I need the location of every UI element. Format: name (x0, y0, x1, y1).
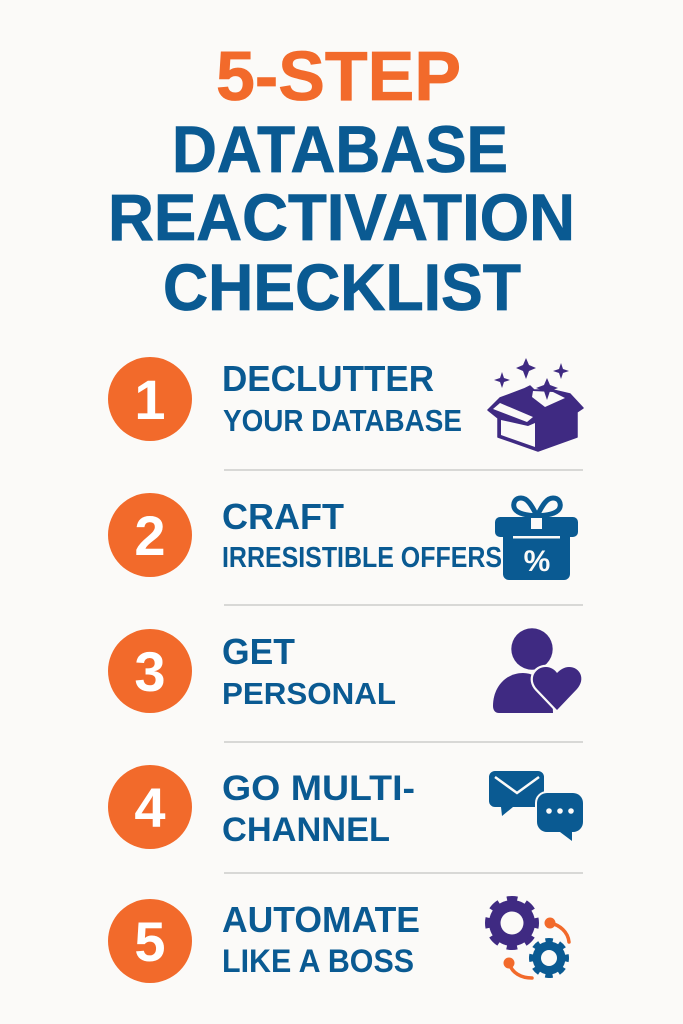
icon: gift with percent: % (524, 545, 550, 578)
step 4 text: CHANNEL (222, 811, 390, 849)
step 2 text: IRRESISTIBLE OFFERS (222, 542, 502, 574)
step 1 (108, 357, 583, 451)
number badge 2: 2 (134, 504, 166, 567)
icon: open box with sparkles (488, 358, 583, 451)
step 5 text: LIKE A BOSS (222, 943, 414, 979)
icon: envelope and chat bubble (489, 771, 583, 841)
number badge 1 (108, 357, 192, 441)
step 4 (108, 765, 583, 849)
step 2 text: CRAFT (222, 496, 344, 537)
step 5 text (222, 899, 420, 979)
number badge 5: 5 (134, 910, 166, 973)
step 3 text: PERSONAL (222, 676, 396, 711)
number badge 5 (108, 899, 192, 983)
icon: person with heart (493, 628, 581, 713)
step 3 text: GET (222, 631, 295, 672)
title: CHECKLIST (163, 250, 521, 324)
title: DATABASE (172, 112, 508, 186)
number badge 4 (108, 765, 192, 849)
step 3 text (222, 631, 396, 711)
icon: gift with percent (495, 498, 578, 580)
step 4 text (222, 769, 415, 849)
number badge 2 (108, 493, 192, 577)
title (108, 37, 575, 324)
title: REACTIVATION (108, 180, 575, 254)
step 1 text: YOUR DATABASE (223, 403, 462, 438)
step 4 text: GO MULTI- (222, 769, 415, 808)
step 5 text: AUTOMATE (222, 899, 420, 940)
title: 5-STEP (216, 37, 461, 115)
step 5 (108, 898, 569, 983)
number badge 3: 3 (134, 640, 166, 703)
number badge 1: 1 (134, 368, 166, 431)
number badge 3 (108, 629, 192, 713)
step 1 text: DECLUTTER (222, 358, 434, 399)
step 2 text (222, 496, 502, 574)
step 1 text (222, 358, 462, 438)
number badge 4: 4 (134, 776, 166, 839)
step 3 (108, 628, 581, 713)
icon: gears with orange arrows (488, 898, 569, 978)
step 2 (108, 493, 578, 580)
